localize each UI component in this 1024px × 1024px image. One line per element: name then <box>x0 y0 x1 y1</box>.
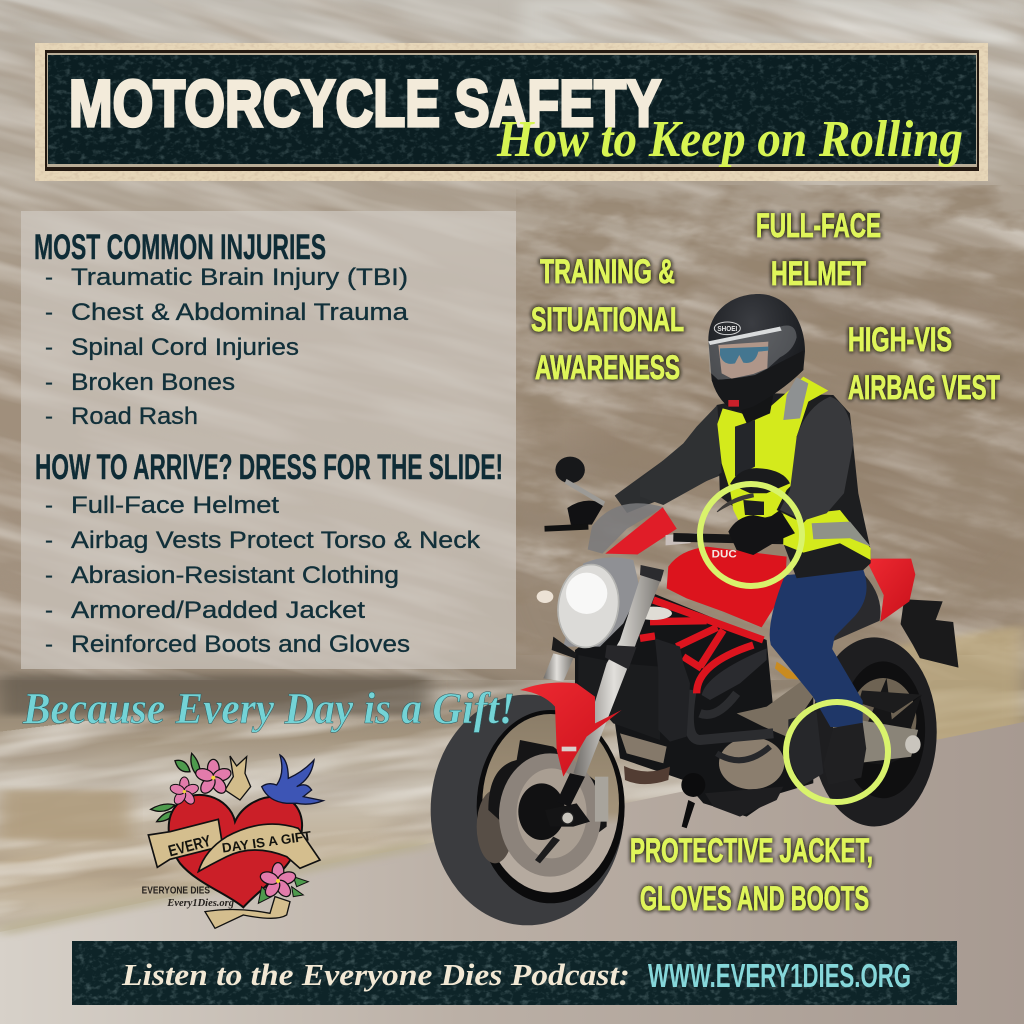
label: high-vis airbag vest <box>848 321 1000 407</box>
cowl <box>605 507 677 554</box>
near arm <box>780 397 853 521</box>
logo wordmark: EVERYONE DIES <box>142 885 210 896</box>
footer text: listen to the podcast: Listen to the Everyone Dies Podcast: <box>121 957 630 992</box>
label: protective jacket, gloves and boots: GLOVES AND BOOTS <box>640 880 869 918</box>
list: injuries: Spinal Cord Injuries <box>71 334 299 361</box>
label: full-face helmet <box>756 207 881 293</box>
list: protective gear: Reinforced Boots and Gloves <box>71 631 410 658</box>
rear shock <box>775 662 804 680</box>
near-side mirror <box>717 468 790 512</box>
near glove <box>728 510 795 555</box>
high-vis vest <box>717 377 871 560</box>
headlight <box>537 557 672 651</box>
logo wordmark <box>142 885 235 909</box>
label: full-face helmet: HELMET <box>771 255 866 293</box>
label: training and situational awareness: SITUATIONAL <box>531 301 684 339</box>
label: training and situational awareness <box>531 253 684 387</box>
label: training and situational awareness: AWARENESS <box>535 349 680 387</box>
near sleeve base <box>640 405 722 505</box>
dark engine mass <box>575 593 813 817</box>
list: injuries: - <box>45 403 53 430</box>
list: injuries: Traumatic Brain Injury (TBI) <box>71 264 408 291</box>
boot <box>823 723 866 785</box>
jacket torso <box>717 393 871 578</box>
label: full-face helmet: FULL-FACE <box>756 207 881 245</box>
front fender <box>520 682 622 777</box>
list: protective gear: - <box>45 527 53 554</box>
list: protective gear: - <box>45 492 53 519</box>
left sleeve <box>615 417 722 513</box>
tail section <box>866 559 915 622</box>
rear wheel <box>812 637 937 826</box>
title banner <box>35 43 988 181</box>
list: injuries: - <box>45 299 53 326</box>
list: injuries: Chest & Abdominal Trauma <box>71 299 409 326</box>
front wheel <box>431 695 625 925</box>
subtitle: how to keep on rolling: How to Keep on Rolling <box>496 111 963 168</box>
helmet: SHOEI <box>717 324 737 333</box>
heart <box>169 795 302 907</box>
label: training and situational awareness: TRAINING & <box>540 253 675 291</box>
engine castings <box>620 680 813 828</box>
foot peg bracket <box>788 711 823 786</box>
panel: injuries and gear list <box>21 211 516 669</box>
seat <box>827 570 880 642</box>
list: protective gear: - <box>45 631 53 658</box>
blue bird <box>262 755 323 804</box>
mirror <box>555 457 604 504</box>
list: injuries: - <box>45 264 53 291</box>
ribbon banner <box>148 819 320 928</box>
heading: most common injuries: MOST COMMON INJURIES <box>34 228 326 267</box>
logo wordmark: Every1Dies.org <box>166 898 235 909</box>
rear of bike <box>812 559 958 826</box>
list: protective gear: - <box>45 597 53 624</box>
neck <box>740 395 773 423</box>
highlight circle: boot <box>786 702 888 802</box>
title: motorcycle safety: MOTORCYCLE SAFETY <box>69 66 661 140</box>
handlebar <box>673 537 783 540</box>
footer banner <box>72 941 957 1005</box>
license plate bracket <box>901 599 958 668</box>
radiator cover <box>655 638 690 742</box>
pink flowers <box>169 759 308 903</box>
windscreen <box>588 503 664 554</box>
tank lettering: DUC <box>712 548 737 560</box>
far lever <box>545 527 588 529</box>
helmet <box>708 294 805 412</box>
logo: every day is a gift heart <box>142 753 323 928</box>
list: protective gear: Abrasion-Resistant Clothing <box>71 562 399 589</box>
illustration: motorcycle and rider <box>431 294 958 925</box>
heading: how to arrive: HOW TO ARRIVE? DRESS FOR THE SLIDE! <box>35 448 503 487</box>
far glove <box>567 501 604 525</box>
list: protective gear <box>45 492 481 658</box>
highlight circle: glove <box>700 484 802 586</box>
red trellis frame <box>640 600 763 693</box>
jeans <box>770 568 867 727</box>
rear leg: jeans and boot <box>545 417 867 786</box>
list: injuries: - <box>45 369 53 396</box>
handlebar base <box>666 533 697 545</box>
ribbon banner: DAY IS A GIFT <box>221 828 312 856</box>
engine, radiator and frame <box>520 547 813 828</box>
radiator <box>578 655 660 740</box>
list: protective gear: Armored/Padded Jacket <box>71 597 365 624</box>
list: injuries <box>45 264 409 430</box>
label: protective jacket, gloves and boots <box>630 832 873 918</box>
rider torso, helmet and hand <box>640 294 871 578</box>
ribbon banner: EVERY <box>167 833 213 861</box>
list: injuries: Broken Bones <box>71 369 235 396</box>
list: injuries: - <box>45 334 53 361</box>
tagline: because every day is a gift: Because Every Day is a Gift! <box>22 684 515 733</box>
list: protective gear: Airbag Vests Protect Torso & Neck <box>71 527 481 554</box>
list: protective gear: Full-Face Helmet <box>71 492 279 519</box>
side cover <box>702 648 767 700</box>
list: protective gear: - <box>45 562 53 589</box>
label: protective jacket, gloves and boots: PROTECTIVE JACKET, <box>630 832 873 870</box>
label: high-vis airbag vest: HIGH-VIS <box>848 321 952 359</box>
front forks <box>543 565 664 807</box>
logo leaves and rear ribbon <box>151 753 251 822</box>
fuel tank <box>667 547 787 627</box>
list: injuries: Road Rash <box>71 403 198 430</box>
